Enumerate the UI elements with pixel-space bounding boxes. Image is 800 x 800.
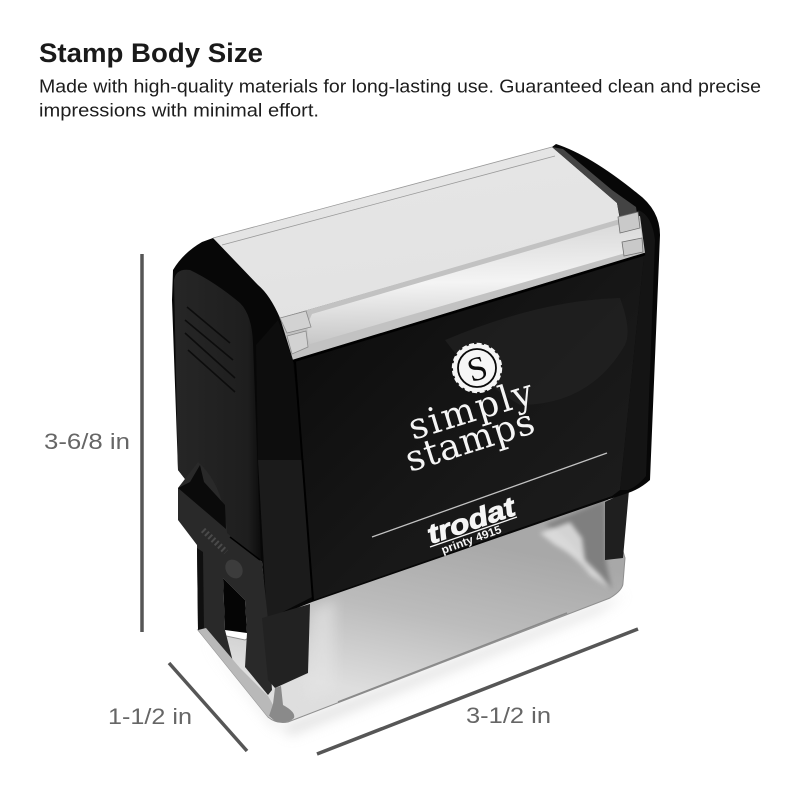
- side mechanism: [178, 462, 272, 695]
- dimension: depth: 1-1/2 in: [108, 704, 192, 729]
- roller tube: [307, 220, 643, 344]
- base light near post: [305, 600, 335, 700]
- logo wordmark: simply: [404, 372, 539, 449]
- mechanism left leg: [197, 548, 204, 630]
- description text: impressions with minimal effort.: [39, 100, 319, 120]
- clear foot strip: [198, 628, 276, 717]
- trodat brand: trodat: [423, 491, 520, 550]
- base dark right region: [545, 500, 612, 590]
- body silhouette: [172, 144, 660, 620]
- roller lower dark edge: [293, 254, 645, 361]
- mechanism slot: [223, 578, 247, 633]
- mechanism round emboss: [222, 556, 246, 582]
- side band: [256, 320, 312, 620]
- front face: [295, 256, 644, 600]
- right side rim: [620, 210, 655, 490]
- body seam line: [372, 453, 607, 537]
- roller right clips: [618, 212, 643, 256]
- lower band: [258, 460, 312, 620]
- right post: [605, 490, 629, 560]
- stamp illustration: [172, 144, 660, 736]
- roller left clips: [280, 311, 311, 354]
- base inner rail: [338, 613, 567, 702]
- window edge line: [213, 147, 555, 245]
- dimension: width: 3-1/2 in: [466, 703, 551, 728]
- logo wordmark: stamps: [400, 401, 540, 481]
- foot corner: [269, 686, 294, 722]
- clear base: [198, 490, 625, 722]
- front vertical crease: [295, 362, 313, 600]
- window top: [213, 147, 620, 318]
- left post: [262, 604, 310, 688]
- cap corner line: [230, 537, 260, 560]
- left end cap: [174, 270, 261, 560]
- trodat brand: [423, 491, 520, 557]
- dimension: width: [317, 629, 638, 754]
- dimension: depth: [108, 663, 247, 751]
- ground shadow: [205, 594, 625, 736]
- logo badge: S: [463, 349, 492, 390]
- logo badge: [453, 344, 501, 392]
- front face sheen: [445, 298, 628, 405]
- mechanism dark wedge: [178, 465, 226, 529]
- base mechanism reflection: [540, 522, 612, 590]
- trodat brand: printy 4915: [440, 524, 504, 557]
- description text: [39, 76, 761, 120]
- description text: Made with high-quality materials for long-lasting use. Guaranteed clean and precise: [39, 76, 761, 96]
- title: Stamp Body Size: [39, 38, 263, 68]
- glass strip under roller: [280, 216, 645, 360]
- mechanism emboss marks: [203, 530, 226, 552]
- window glass end: [552, 147, 638, 220]
- cap grip lines: [185, 307, 235, 392]
- dimension: height: 3-6/8 in: [44, 429, 130, 454]
